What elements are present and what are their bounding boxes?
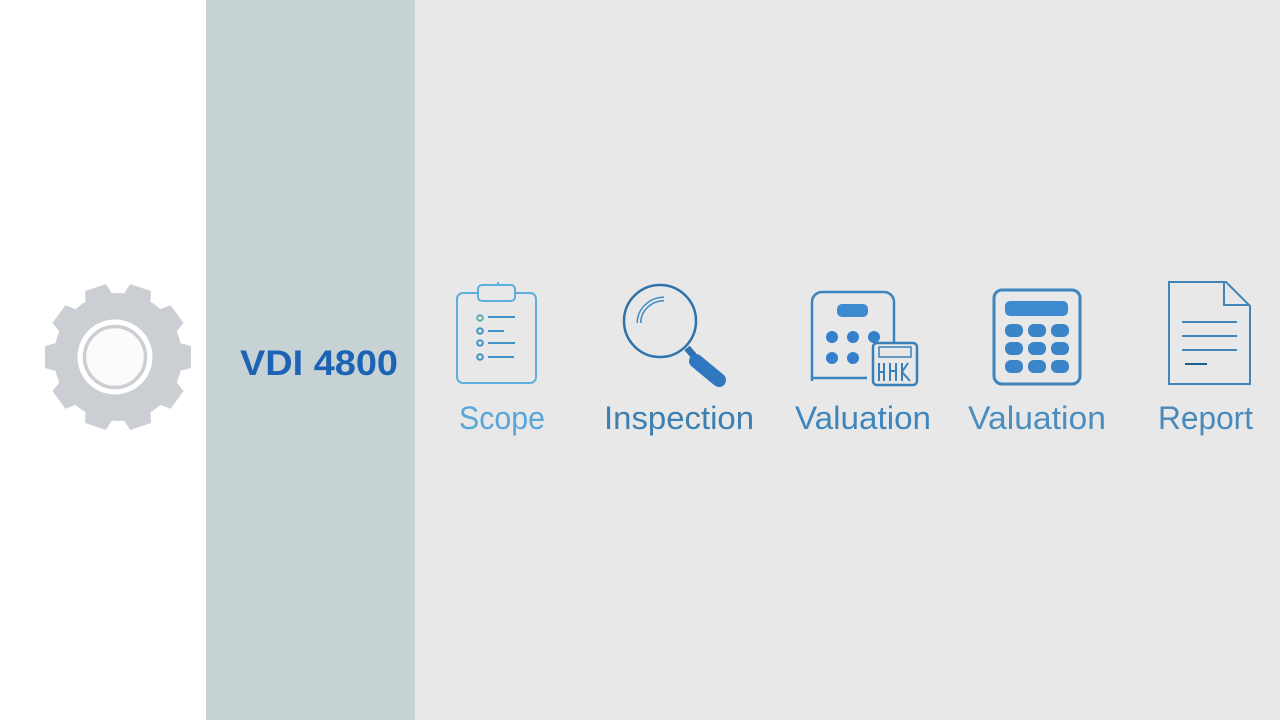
icon: clipboard checklist bbox=[457, 282, 536, 383]
title: VDI 4800: VDI 4800 bbox=[240, 344, 398, 383]
label: Scope: Scope bbox=[459, 400, 545, 436]
icon: valuation device with calculator bbox=[812, 292, 917, 385]
label: Inspection: Inspection bbox=[604, 400, 754, 436]
icon: calculator bbox=[994, 290, 1080, 384]
icon: gear bbox=[45, 283, 191, 431]
panel: title column bbox=[206, 0, 415, 720]
icon: report document bbox=[1169, 282, 1250, 384]
label: Report: Report bbox=[1158, 400, 1253, 436]
icon: magnifying glass bbox=[624, 285, 719, 380]
panel: white left column bbox=[0, 0, 206, 720]
label: Valuation (first): Valuation bbox=[795, 400, 931, 436]
label: Valuation (second): Valuation bbox=[968, 400, 1106, 436]
panel: process steps background bbox=[415, 0, 1280, 720]
